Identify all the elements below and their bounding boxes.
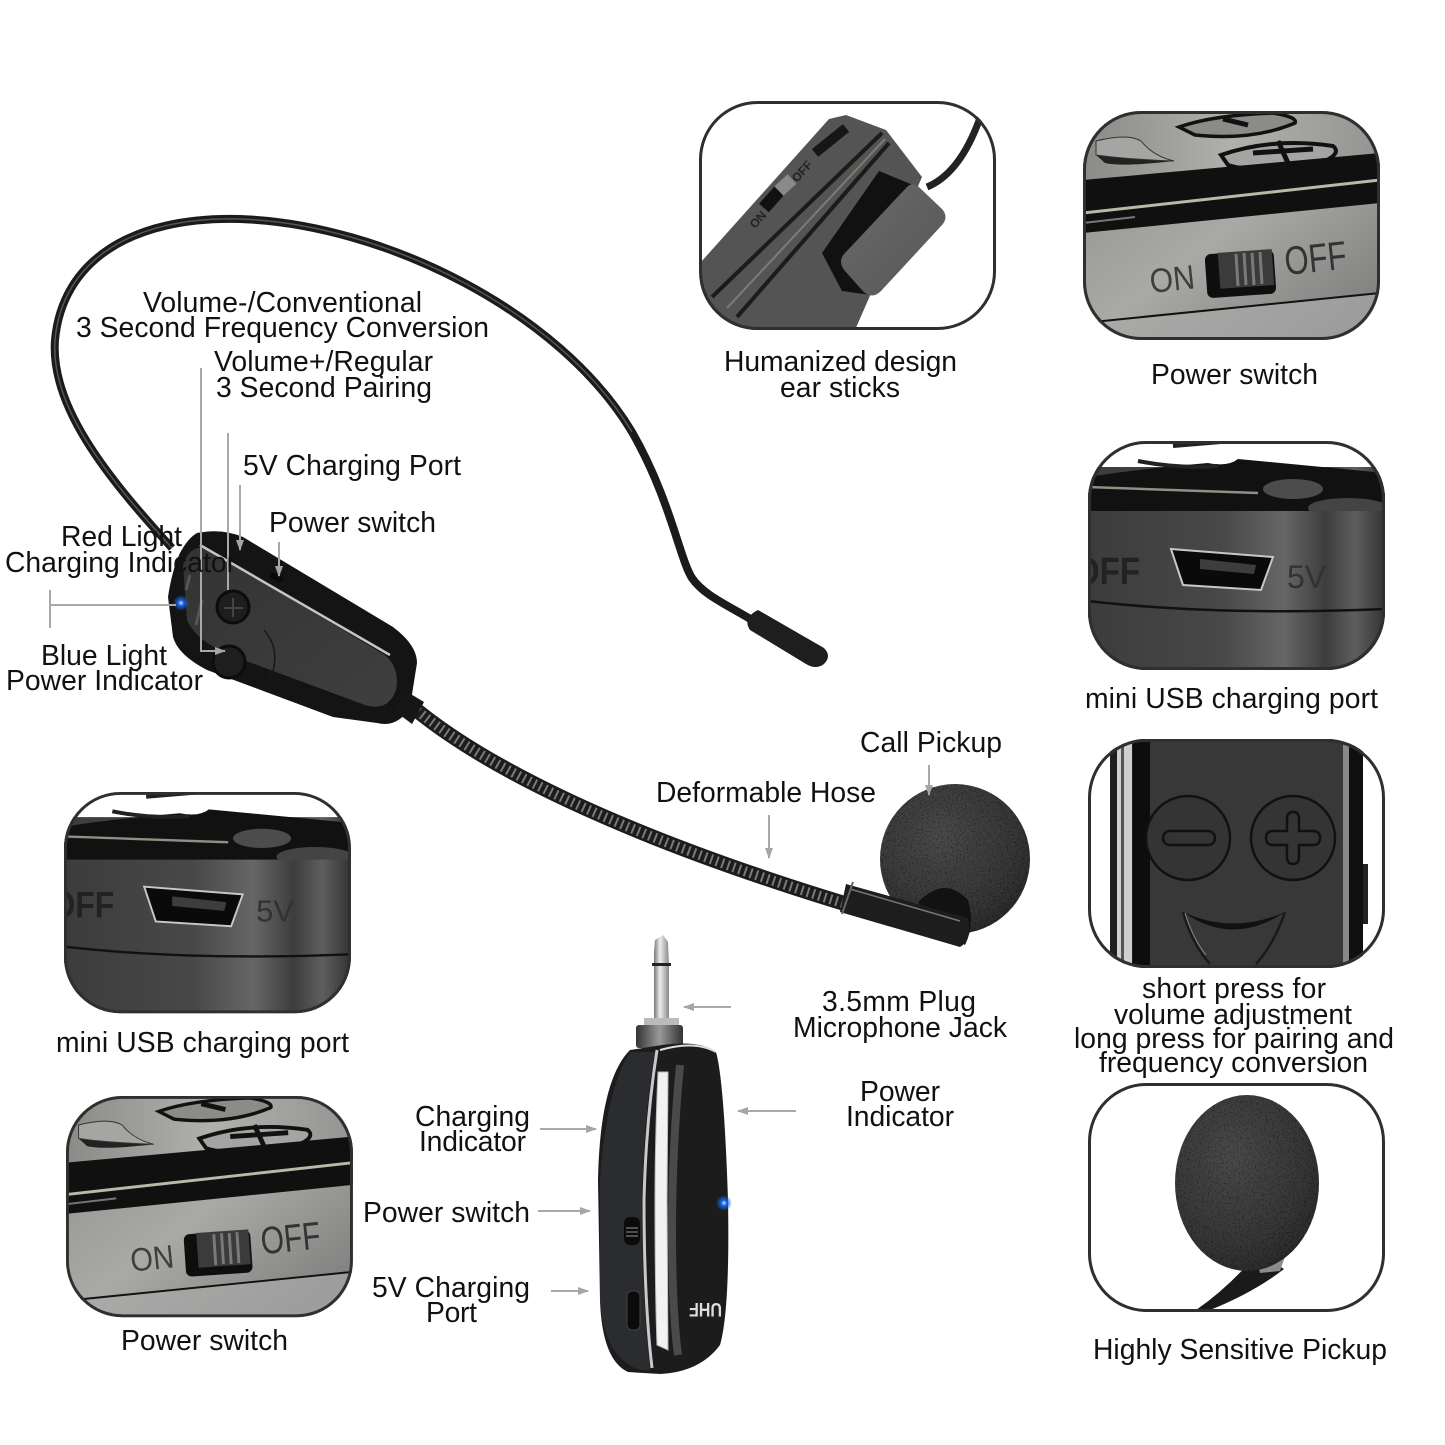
icon: smile mark (1183, 912, 1285, 964)
caption: mini USB left: mini USB charging port (56, 1026, 349, 1058)
panel: foam pickup (1088, 1083, 1385, 1312)
panel label: off: OFF (1074, 551, 1140, 593)
leader arrows: receiver (538, 1007, 796, 1291)
icon: receiver charging port (627, 1291, 640, 1330)
caption: mini USB top right: mini USB charging port (1085, 682, 1378, 714)
text: charging indicator label: Charging (415, 1100, 530, 1132)
text: volume plus label: 3 Second Pairing (216, 371, 432, 403)
headset: control box (168, 531, 424, 724)
receiver: wireless plug-in unit (598, 935, 732, 1374)
caption: volume button description: frequency conversion (1099, 1046, 1368, 1078)
panel label: off: OFF (50, 885, 114, 926)
panel: power switch top right (1083, 111, 1380, 340)
text: blue light label: Power Indicator (6, 664, 203, 696)
text: charging indicator label: Indicator (419, 1125, 526, 1157)
text: microphone jack label: 3.5mm Plug (822, 985, 976, 1017)
panel: volume buttons (1088, 739, 1385, 968)
headset: ear hook cable (55, 219, 828, 667)
icon: plus button (217, 591, 249, 623)
icon: receiver blue light (716, 1195, 732, 1211)
text: microphone jack label: Microphone Jack (793, 1011, 1008, 1043)
icon: micro USB port (1171, 549, 1273, 590)
text: microphone jack label (793, 985, 1008, 1043)
panel: humanized ear stick (699, 101, 996, 330)
text: red light label (5, 520, 236, 578)
panel label: on: ON (129, 1237, 176, 1279)
text: receiver charging port label: 5V Charging (372, 1271, 530, 1303)
text: blue light label: Blue Light (41, 639, 167, 671)
caption: power switch left: Power switch (121, 1324, 288, 1356)
caption: volume button description (1074, 972, 1394, 1078)
panel label: on: ON (1148, 258, 1197, 301)
text: volume plus label: Volume+/Regular (214, 345, 433, 377)
panel: power switch left (66, 1096, 353, 1317)
caption: humanized design (724, 345, 957, 403)
text: red light label: Charging Indicator (5, 546, 236, 578)
headset: gooseneck hose (408, 703, 846, 904)
leader lines and arrows: headset (50, 368, 929, 858)
caption: power switch top right: Power switch (1151, 358, 1318, 390)
panel label: 5V: 5V (1287, 559, 1327, 595)
text: power indicator label: Power (860, 1075, 940, 1107)
text: deformable hose label: Deformable Hose (656, 776, 876, 808)
text: power indicator label (846, 1075, 954, 1132)
caption: humanized design: ear sticks (780, 371, 900, 403)
receiver: UHF mark: UHF (689, 1298, 722, 1319)
panel: mini USB top right (1074, 441, 1388, 670)
icon: minus button (1146, 796, 1230, 880)
text: power switch label: Power switch (269, 506, 436, 538)
panel label: off: OFF (1282, 234, 1349, 284)
text: charging indicator label (415, 1100, 530, 1157)
icon: micro USB port (144, 887, 243, 926)
icon: minus button (213, 646, 245, 678)
text: volume minus label: 3 Second Frequency Conversion (76, 311, 489, 343)
text: volume minus label: Volume-/Conventional (143, 286, 422, 318)
panel label: on off: ON (747, 208, 769, 231)
receiver: 3.5mm jack (636, 935, 683, 1048)
caption: volume button description: volume adjustment (1114, 998, 1352, 1030)
caption: volume button description: short press for (1142, 972, 1326, 1004)
headset: foam microphone head (840, 784, 1030, 947)
text: 5V charging port label: 5V Charging Port (243, 449, 461, 481)
panel label: 5V: 5V (256, 893, 294, 928)
icon: blue power light (173, 595, 189, 611)
panel: humanized ear stick: OFF (789, 158, 815, 185)
icon: receiver power switch (624, 1217, 640, 1245)
text: volume minus label (76, 286, 489, 343)
text: receiver power switch label: Power switch (363, 1196, 530, 1228)
caption: volume button description: long press for pairing and (1074, 1022, 1394, 1054)
text: power indicator label: Indicator (846, 1100, 954, 1132)
caption: highly sensitive pickup: Highly Sensitive Pickup (1093, 1333, 1387, 1365)
caption: humanized design: Humanized design (724, 345, 957, 377)
text: receiver charging port label (372, 1271, 530, 1328)
panel: mini USB left (50, 792, 354, 1013)
panel label: off: OFF (259, 1214, 323, 1263)
text: blue light label (6, 639, 203, 696)
text: red light label: Red Light (61, 520, 182, 552)
icon: plus button (1251, 796, 1335, 880)
text: receiver charging port label: Port (426, 1296, 477, 1328)
text: call pickup label: Call Pickup (860, 726, 1002, 758)
text: volume plus label (214, 345, 433, 403)
